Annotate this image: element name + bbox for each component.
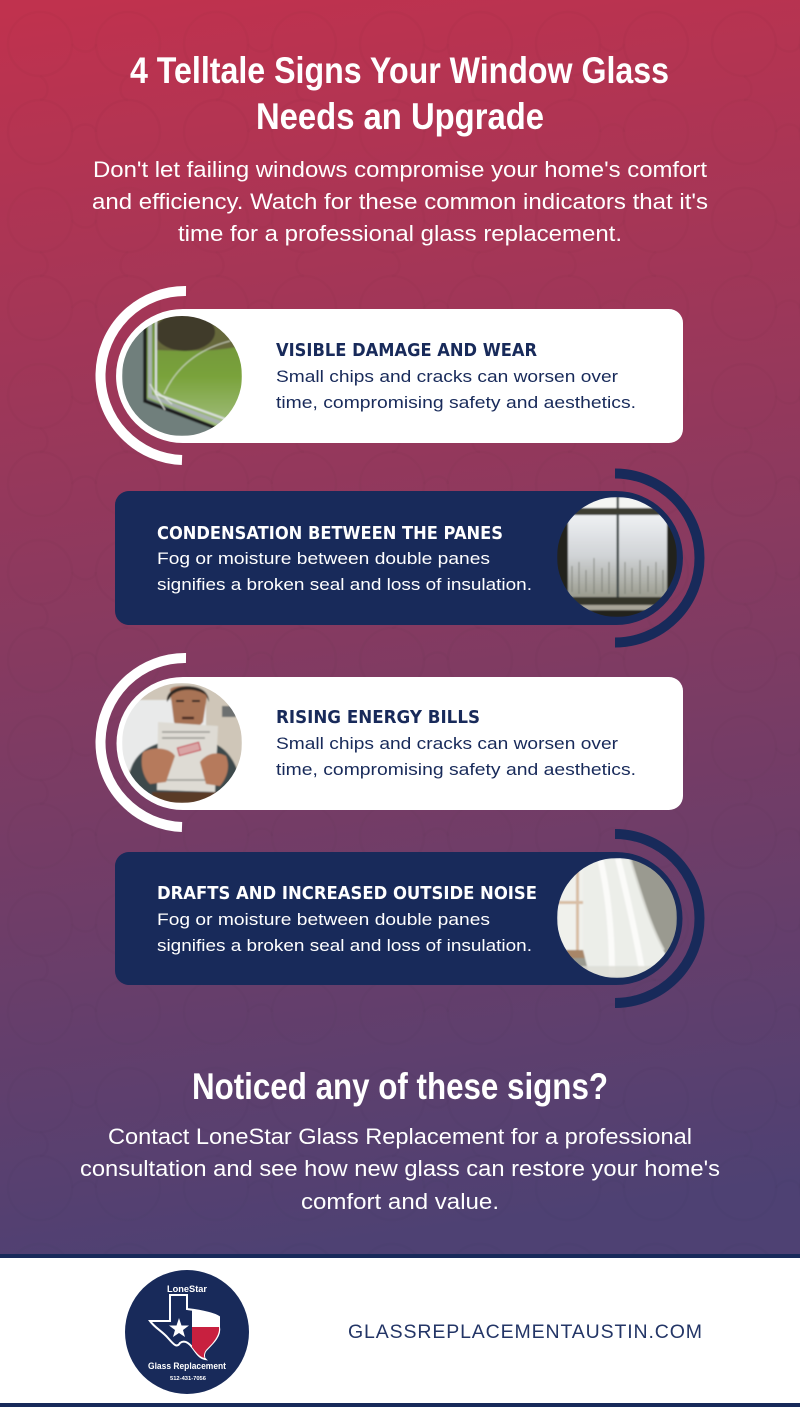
arc: white ring — [101, 658, 186, 827]
call to action text: Contact LoneStar Glass Replacement for a professional — [108, 1124, 692, 1149]
call to action heading: Noticed any of these signs? — [192, 1066, 608, 1107]
photo: curtain blowing in a draft — [557, 858, 677, 978]
arc: navy ring — [615, 474, 700, 642]
card body: Fog or moisture between double panes — [157, 910, 490, 929]
intro text: and efficiency. Watch for these common indicators that it's — [92, 189, 708, 214]
footer panel — [0, 1254, 800, 1407]
arc: navy ring — [615, 834, 700, 1003]
card body — [276, 734, 636, 779]
card background — [115, 491, 683, 625]
title: 4 Telltale Signs Your Window Glass — [130, 50, 669, 91]
call to action text — [80, 1124, 720, 1214]
call to action text: consultation and see how new glass can restore your home's — [80, 1156, 720, 1181]
card background — [116, 309, 683, 443]
card body — [157, 910, 532, 955]
card body: time, compromising safety and aesthetics. — [276, 760, 636, 779]
card body: Small chips and cracks can worsen over — [276, 367, 618, 386]
card heading: VISIBLE DAMAGE AND WEAR — [276, 340, 537, 361]
arc: white ring — [101, 291, 186, 460]
card heading: CONDENSATION BETWEEN THE PANES — [157, 523, 503, 544]
icon: Texas flag map — [150, 1295, 219, 1359]
card body — [157, 549, 532, 594]
card body: Small chips and cracks can worsen over — [276, 734, 618, 753]
logo: LoneStar Glass Replacement: Glass Replacement — [148, 1361, 226, 1371]
intro text: time for a professional glass replacement. — [178, 221, 622, 246]
photo: cracked window — [122, 313, 245, 436]
card background — [116, 677, 683, 810]
logo: LoneStar Glass Replacement: 512-431-7056 — [170, 1376, 206, 1382]
website url: GLASSREPLACEMENTAUSTIN.COM — [348, 1321, 702, 1343]
card body: time, compromising safety and aesthetics. — [276, 393, 636, 412]
panel: rising energy bills — [101, 658, 683, 827]
panel: drafts and increased outside noise — [115, 834, 700, 1003]
panel: condensation between the panes — [115, 474, 700, 642]
title — [130, 50, 669, 137]
logo: LoneStar Glass Replacement: LoneStar — [167, 1284, 208, 1294]
logo: LoneStar Glass Replacement — [125, 1270, 249, 1394]
card body: signifies a broken seal and loss of insulation. — [157, 936, 532, 955]
intro text: Don't let failing windows compromise your home's comfort — [93, 157, 707, 182]
intro text — [92, 157, 708, 246]
call to action text: comfort and value. — [301, 1189, 499, 1214]
photo: worried person reading a bill — [122, 683, 242, 803]
card heading: RISING ENERGY BILLS — [276, 707, 480, 728]
card body — [276, 367, 636, 412]
panel: visible damage and wear — [101, 291, 683, 460]
card background — [115, 852, 682, 985]
title: Needs an Upgrade — [256, 96, 544, 137]
card body: signifies a broken seal and loss of insulation. — [157, 575, 532, 594]
card body: Fog or moisture between double panes — [157, 549, 490, 568]
card heading: DRAFTS AND INCREASED OUTSIDE NOISE — [157, 883, 537, 904]
photo: foggy window — [557, 497, 677, 617]
